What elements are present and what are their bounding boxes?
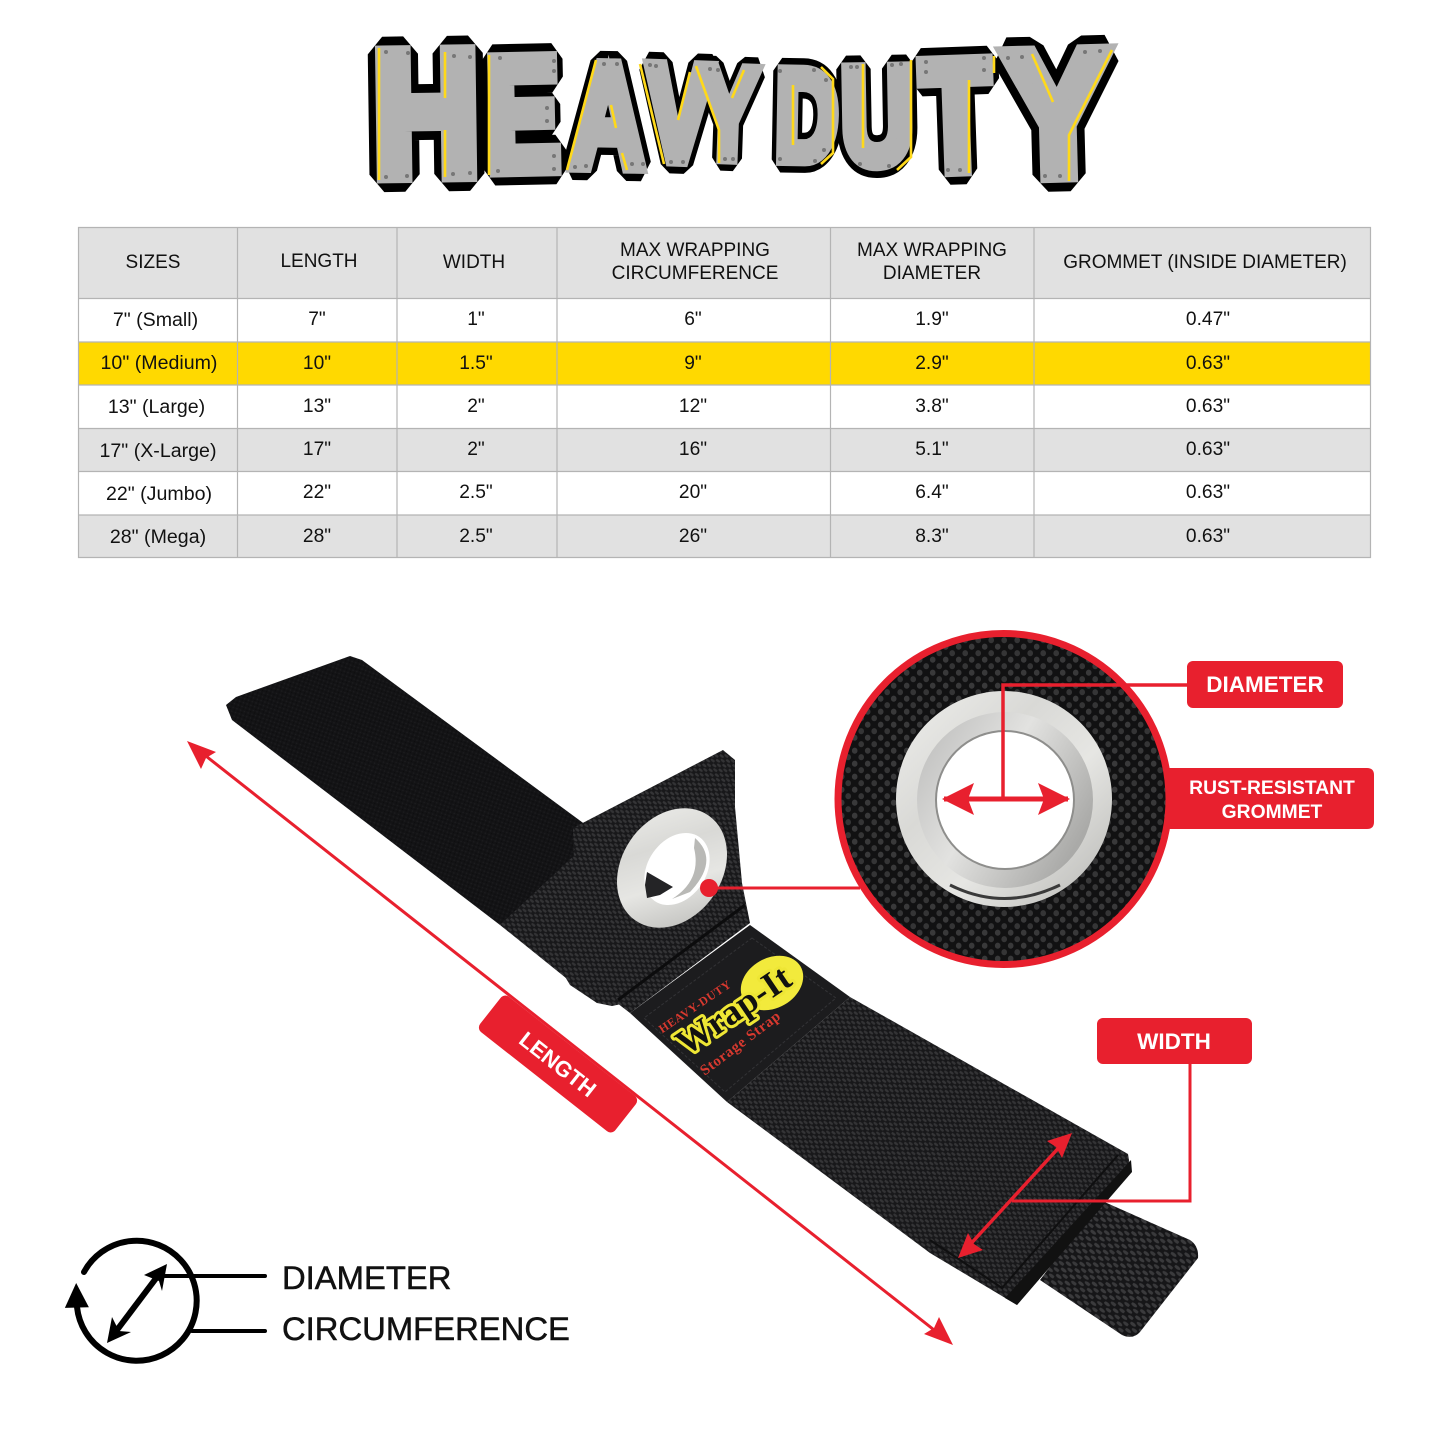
- Wrap-It brand text: Wrap-It: [668, 957, 798, 1063]
- row: 17 inch x-large: 17" (X-Large): [100, 440, 216, 462]
- row: 17 inch x-large: 5.1": [915, 439, 949, 460]
- label patch: [630, 925, 850, 1102]
- title: Heavy Duty logo: Y: [1003, 15, 1112, 213]
- row: 13 inch large: 13": [303, 396, 331, 417]
- row: 7 inch small: 1": [467, 309, 485, 330]
- table header row: LENGTH: [280, 251, 358, 272]
- row: 28 inch mega: [110, 526, 1230, 548]
- width arrow: [958, 1133, 1072, 1258]
- row: 22 inch jumbo: [106, 482, 1230, 505]
- legend: diameter and circumference: [63, 1241, 570, 1361]
- title: Heavy Duty logo: Y: [1003, 15, 1112, 213]
- length label: LENGTH: [514, 1027, 601, 1102]
- legend circle icon with arrows: [63, 1241, 265, 1361]
- title: Heavy Duty logo: T: [919, 28, 993, 203]
- yellow circle: [731, 945, 813, 1021]
- table header row: WIDTH: [443, 252, 505, 273]
- grommet: [594, 787, 750, 949]
- Heavy-Duty text: HEAVY-DUTY: [656, 977, 734, 1036]
- row: 22 inch jumbo: 2.5": [459, 482, 493, 503]
- row: 17 inch x-large: [100, 439, 1230, 462]
- row: 28 inch mega: 28" (Mega): [110, 526, 206, 548]
- row: 10 inch medium: 10": [303, 353, 331, 374]
- row: 10 inch medium: 0.63": [1186, 353, 1230, 374]
- length arrow: [187, 741, 953, 1345]
- rust-resistant grommet callout: RUST-RESISTANT: [1189, 778, 1355, 799]
- magnified grommet circle: [838, 634, 1169, 964]
- lower strap: [727, 997, 1132, 1305]
- strap tail: [1040, 1200, 1198, 1337]
- table header row: SIZES: [126, 252, 180, 273]
- table row backgrounds: [78, 227, 1370, 558]
- row: 28 inch mega: 0.63": [1186, 526, 1230, 547]
- row: 17 inch x-large: 16": [679, 439, 707, 460]
- row: 13 inch large: [108, 396, 1230, 418]
- title: Heavy Duty logo: H: [372, 16, 480, 213]
- title: Heavy Duty logo: H: [372, 16, 480, 213]
- row: 10 inch medium: [101, 352, 1230, 374]
- row: 13 inch large: 3.8": [915, 396, 949, 417]
- length label: [477, 993, 639, 1135]
- strap product illustration: [226, 656, 1198, 1337]
- row: 17 inch x-large: 2": [467, 439, 485, 460]
- title: Heavy Duty logo: A: [570, 33, 646, 198]
- table header row: DIAMETER: [883, 263, 981, 284]
- row: 28 inch mega: 26": [679, 526, 707, 547]
- large grommet: [896, 691, 1112, 907]
- row: 22 inch jumbo: 6.4": [915, 482, 949, 503]
- title: Heavy Duty logo: E: [485, 25, 561, 204]
- row: 28 inch mega: 28": [303, 526, 331, 547]
- grommet tab: [555, 750, 750, 1013]
- title: Heavy Duty logo: U: [840, 39, 915, 193]
- legend labels: DIAMETER: [282, 1259, 451, 1296]
- table header row: MAX WRAPPING: [857, 240, 1007, 261]
- row: 7 inch small: [113, 309, 1230, 331]
- table header row: MAX WRAPPING: [620, 240, 770, 261]
- grommet pointer line: [700, 879, 860, 897]
- webbing under tab: [500, 850, 640, 1006]
- row: 13 inch large: 13" (Large): [108, 396, 205, 418]
- table header row: GROMMET (INSIDE DIAMETER): [1063, 252, 1347, 273]
- legend: diameter and circumference: CIRCUMFERENCE: [282, 1310, 570, 1347]
- row: 22 inch jumbo: 20": [679, 482, 707, 503]
- row: 22 inch jumbo: 22": [303, 482, 331, 503]
- rust-resistant grommet callout: GROMMET: [1222, 802, 1323, 823]
- title: Heavy Duty logo: Y: [697, 41, 760, 187]
- title: Heavy Duty logo: T: [919, 28, 993, 203]
- row: 7 inch small: 7" (Small): [113, 309, 198, 331]
- row: 28 inch mega: 2.5": [459, 526, 493, 547]
- title: Heavy Duty logo: E: [485, 25, 561, 204]
- row: 10 inch medium: 9": [684, 353, 702, 374]
- title: Heavy Duty logo: D: [774, 43, 839, 189]
- width callout: WIDTH: [1137, 1029, 1211, 1054]
- title: Heavy Duty logo: Y: [697, 41, 760, 187]
- diameter callout: [942, 661, 1343, 815]
- rust-resistant grommet callout: [1166, 768, 1374, 829]
- row: 7 inch small: 7": [308, 309, 326, 330]
- velcro section: [226, 656, 590, 925]
- title: Heavy Duty logo: D: [774, 43, 839, 189]
- row: 17 inch x-large: 17": [303, 439, 331, 460]
- title: Heavy Duty logo: [372, 15, 1112, 213]
- row: 17 inch x-large: 0.63": [1186, 439, 1230, 460]
- table header row: [126, 240, 1347, 284]
- row: 7 inch small: 1.9": [915, 309, 949, 330]
- row: 22 inch jumbo: 0.63": [1186, 482, 1230, 503]
- size table: [78, 227, 1370, 558]
- row: 22 inch jumbo: 22" (Jumbo): [106, 483, 212, 505]
- row: 7 inch small: 0.47": [1186, 309, 1230, 330]
- row: 13 inch large: 0.63": [1186, 396, 1230, 417]
- title: Heavy Duty logo: V: [644, 37, 714, 191]
- width callout: [1012, 1018, 1252, 1201]
- table header row: CIRCUMFERENCE: [612, 263, 778, 284]
- title: Heavy Duty logo: U: [840, 39, 915, 193]
- row: 10 inch medium: 1.5": [459, 353, 493, 374]
- row: 10 inch medium: 2.9": [915, 353, 949, 374]
- row: 28 inch mega: 8.3": [915, 526, 949, 547]
- diameter callout: DIAMETER: [1206, 672, 1324, 697]
- row: 10 inch medium: 10" (Medium): [101, 352, 217, 374]
- Storage Strap text: Storage Strap: [697, 1009, 784, 1079]
- title: Heavy Duty logo: V: [644, 37, 714, 191]
- row: 13 inch large: 12": [679, 396, 707, 417]
- row: 13 inch large: 2": [467, 396, 485, 417]
- title: Heavy Duty logo: A: [570, 33, 646, 198]
- row: 7 inch small: 6": [684, 309, 702, 330]
